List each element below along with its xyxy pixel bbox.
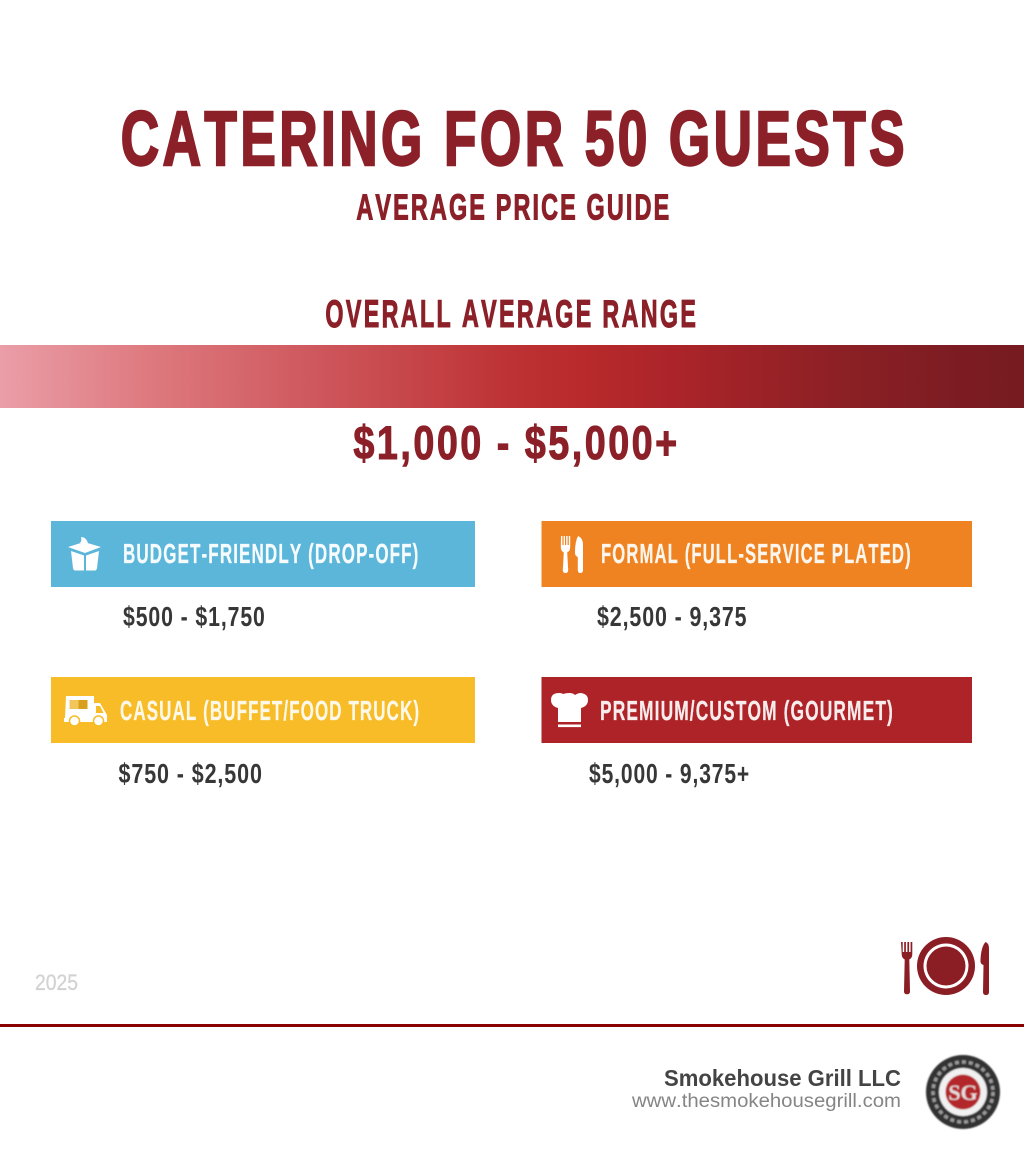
icon: chef hat xyxy=(551,693,588,727)
panel: casual xyxy=(51,677,475,790)
panel: premium/custom xyxy=(542,677,972,790)
premium band xyxy=(542,677,972,743)
formal band xyxy=(542,521,972,587)
formal label: FORMAL (FULL-SERVICE PLATED) xyxy=(601,538,912,569)
icon: plate with fork and knife xyxy=(901,937,989,995)
panel: formal xyxy=(542,521,972,633)
heading: overall average range: OVERALL AVERAGE RANGE xyxy=(325,292,698,335)
panel: budget-friendly xyxy=(51,521,475,633)
overall price range: $1,000 - $5,000+ xyxy=(353,417,680,470)
title: CATERING FOR 50 GUESTS xyxy=(121,97,908,183)
formal price: $2,500 - 9,375 xyxy=(597,603,747,633)
gradient range bar xyxy=(0,345,1024,408)
year label: 2025 xyxy=(35,970,78,995)
budget band xyxy=(51,521,475,587)
website: www.thesmokehousegrill.com xyxy=(631,1090,901,1112)
casual price: $750 - $2,500 xyxy=(118,760,263,790)
premium label: PREMIUM/CUSTOM (GOURMET) xyxy=(600,695,894,726)
icon: takeout box xyxy=(68,537,101,570)
logo badge: SG xyxy=(948,1080,978,1105)
icon: fork and knife xyxy=(561,536,583,573)
casual label: CASUAL (BUFFET/FOOD TRUCK) xyxy=(120,695,420,726)
subtitle: AVERAGE PRICE GUIDE xyxy=(356,189,671,228)
budget price: $500 - $1,750 xyxy=(123,603,266,633)
icon: food truck xyxy=(64,696,107,726)
logo badge xyxy=(926,1055,1000,1129)
casual band xyxy=(51,677,475,743)
premium price: $5,000 - 9,375+ xyxy=(589,759,750,790)
budget label: BUDGET-FRIENDLY (DROP-OFF) xyxy=(123,538,419,569)
footer rule xyxy=(0,1024,1024,1027)
company name: Smokehouse Grill LLC xyxy=(664,1065,901,1091)
